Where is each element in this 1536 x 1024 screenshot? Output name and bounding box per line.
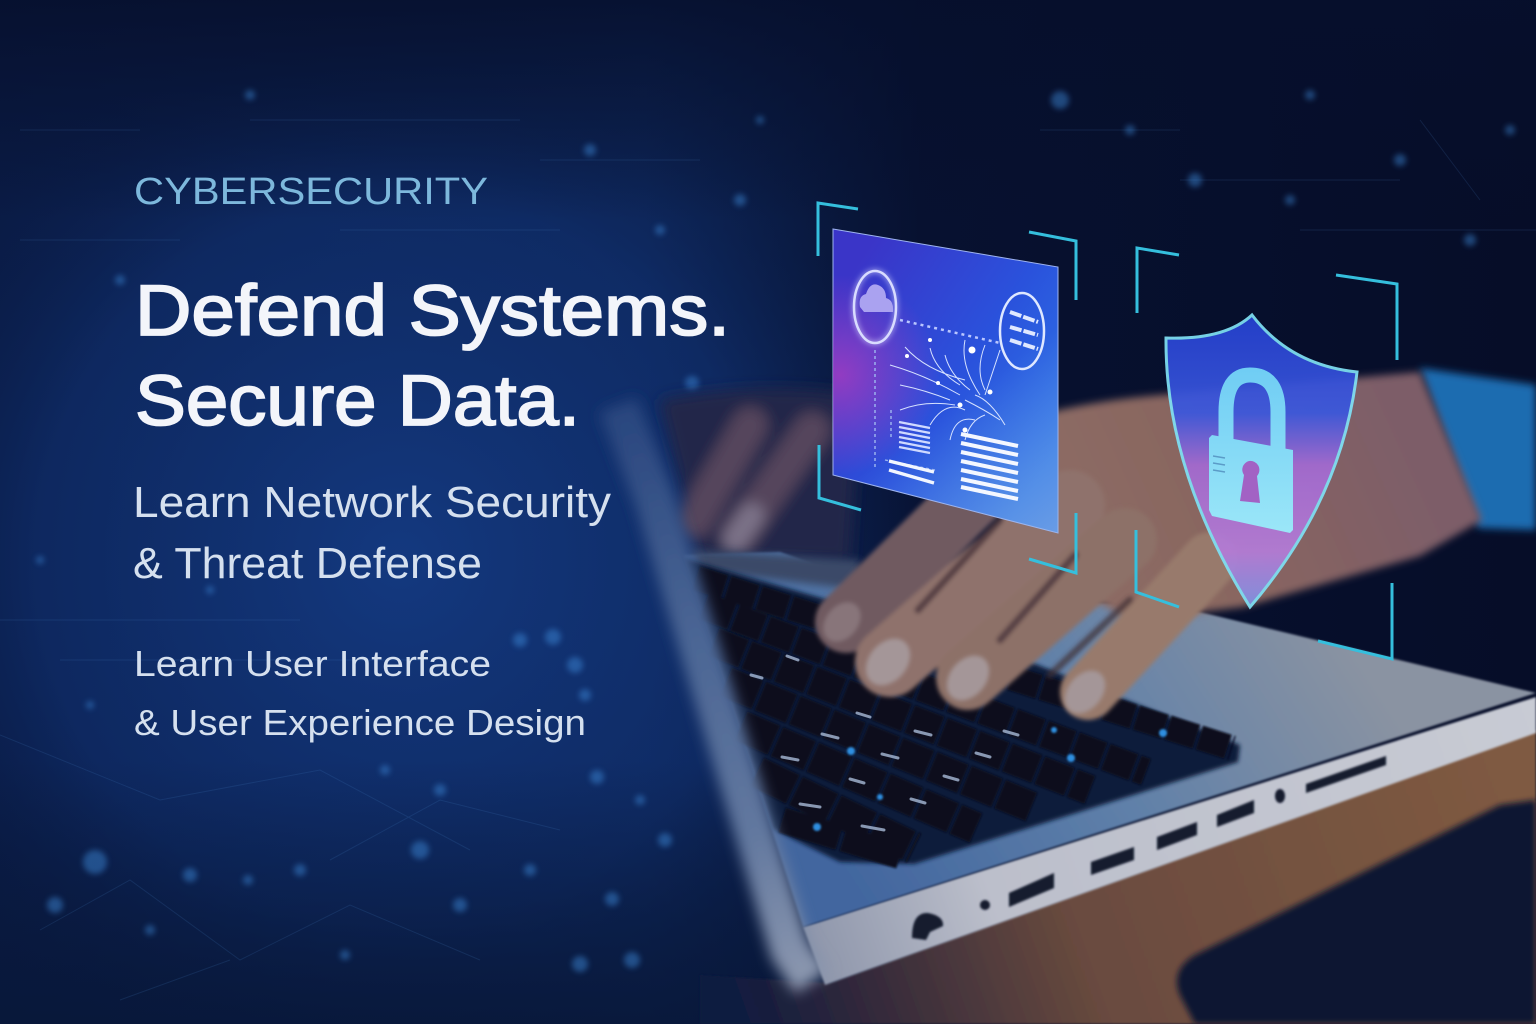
sleeve cuff xyxy=(1420,368,1536,530)
main heading xyxy=(135,272,730,441)
subheading: UI and UX design: & User Experience Design xyxy=(134,702,586,743)
wooden table xyxy=(700,730,1536,1024)
text lines large xyxy=(961,434,1018,499)
keyboard xyxy=(683,558,1240,864)
key glints xyxy=(751,656,1018,830)
dotted connector xyxy=(900,320,1000,343)
security shield with padlock xyxy=(1166,315,1357,607)
subheading: network security xyxy=(133,478,611,588)
typing hand xyxy=(816,372,1482,721)
ports xyxy=(912,756,1386,940)
subheading: network security: & Threat Defense xyxy=(133,539,482,588)
fingers xyxy=(846,480,1210,692)
dashed axis xyxy=(875,350,935,470)
shield corner brackets xyxy=(1136,248,1397,659)
text lines small xyxy=(899,422,930,453)
main heading: Secure Data. xyxy=(135,362,580,441)
subheading: UI and UX design: Learn User Interface xyxy=(134,643,491,684)
eyebrow label: CYBERSECURITY xyxy=(134,171,488,213)
blurred left hand behind the screen xyxy=(660,389,860,560)
key backlight dots xyxy=(813,727,1167,831)
components circle xyxy=(1000,293,1044,369)
laptop screen lid edge xyxy=(618,405,812,982)
main heading: Defend Systems. xyxy=(135,272,730,351)
phone on the table xyxy=(1177,800,1536,1024)
laptop deck xyxy=(683,550,1536,927)
back of hand xyxy=(1000,372,1482,620)
text lines lower left xyxy=(889,461,934,483)
cloud icon circle xyxy=(854,271,896,343)
panel corner brackets xyxy=(818,203,1076,573)
subheading: network security: Learn Network Security xyxy=(133,478,611,527)
subheading: UI and UX design xyxy=(134,643,586,743)
holographic data panel xyxy=(833,229,1058,533)
fingernails xyxy=(816,595,1113,721)
circuit tree xyxy=(890,338,1005,440)
laptop side with ports xyxy=(803,697,1536,985)
padlock xyxy=(1209,375,1293,533)
